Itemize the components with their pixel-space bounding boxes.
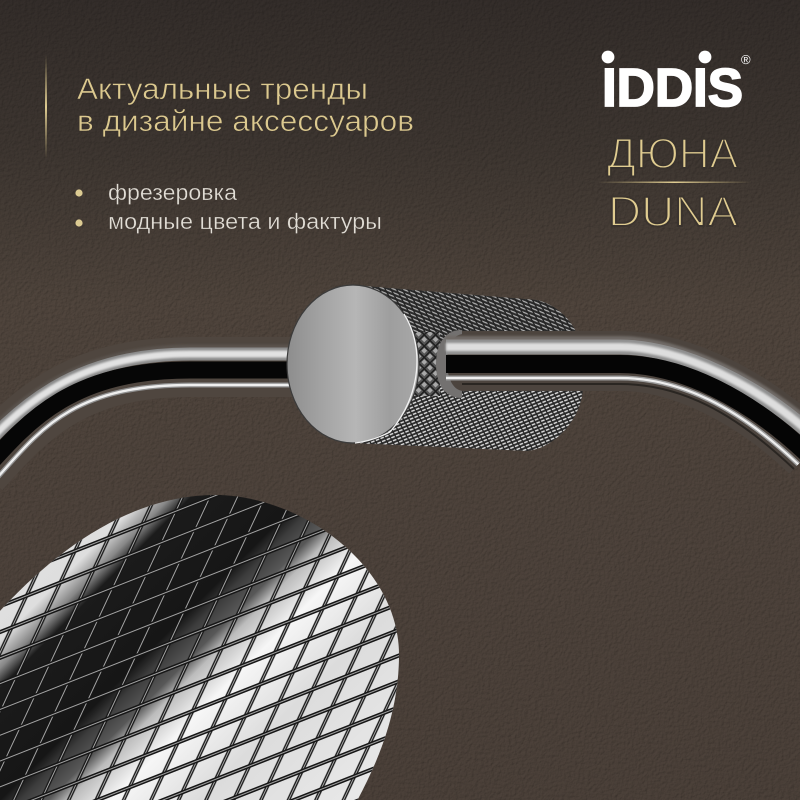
IDDIS logo: ® bbox=[741, 52, 751, 67]
collar around the tube bbox=[436, 330, 462, 398]
knurl diamonds beside the collar bbox=[414, 332, 440, 396]
bullet list bbox=[75, 180, 382, 234]
bullet dot 2 bbox=[75, 219, 83, 227]
zoomed knurling circle bbox=[0, 480, 420, 800]
holder end face bbox=[287, 285, 419, 443]
chrome towel ring: left tube bbox=[0, 347, 295, 482]
heading: Актуальные тренды bbox=[77, 73, 368, 106]
knurled cylinder body of the holder bbox=[352, 285, 583, 451]
series name: Дюна: ДЮНА bbox=[607, 130, 738, 178]
gold vertical accent line bbox=[45, 55, 47, 159]
heading: в дизайне аксессуаров bbox=[77, 105, 414, 138]
heading bbox=[77, 73, 414, 138]
bullet text 2: модные цвета и фактуры bbox=[108, 209, 382, 234]
gold divider bbox=[597, 182, 752, 183]
bullet text 1: фрезеровка bbox=[108, 180, 238, 205]
chrome towel ring: right tube bbox=[436, 330, 800, 469]
bullet dot 1 bbox=[75, 189, 83, 197]
IDDIS logo: IDDIS bbox=[602, 58, 743, 118]
series name: Duna: DUNA bbox=[608, 188, 738, 236]
